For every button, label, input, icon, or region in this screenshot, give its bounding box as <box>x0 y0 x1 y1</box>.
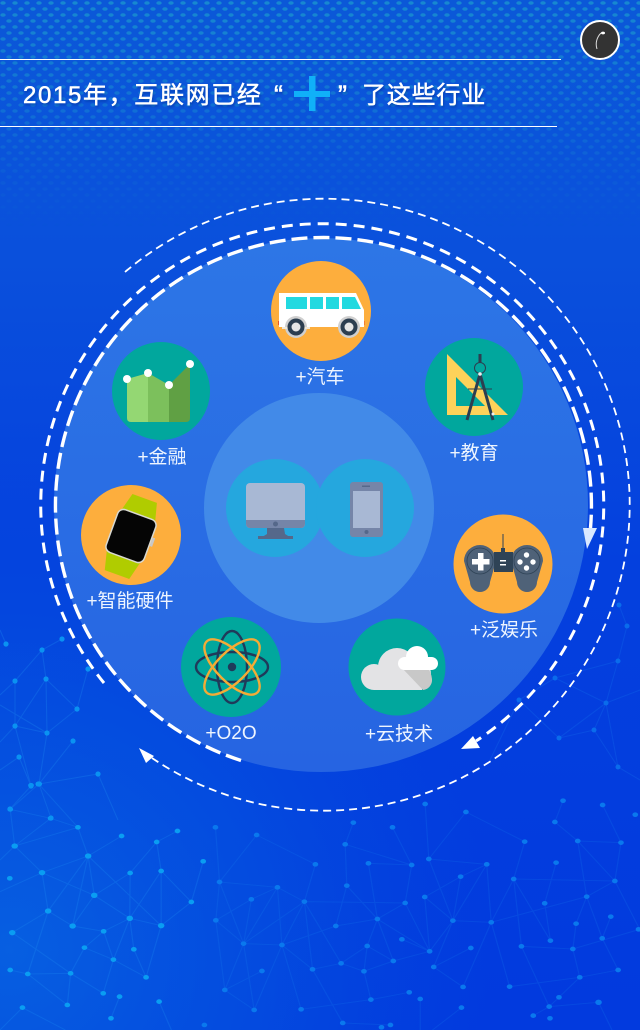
icon: bus <box>278 293 364 338</box>
icon: desktop computer <box>246 483 305 539</box>
label: 泛娱乐: +泛娱乐 <box>470 619 538 641</box>
item: 泛娱乐 <box>454 514 552 641</box>
icon: smart watch <box>97 491 167 583</box>
arrow ring middle <box>41 224 604 749</box>
icon: atom <box>196 631 268 703</box>
center circle <box>204 393 434 623</box>
item: 云技术 <box>348 618 446 745</box>
icon: game controller <box>464 534 543 592</box>
label: 汽车: +汽车 <box>295 366 345 388</box>
title: 2015年，互联网已经 <box>23 82 263 109</box>
label: 智能硬件: +智能硬件 <box>86 590 174 612</box>
icon: area chart <box>123 360 194 422</box>
icon: smartphone <box>350 482 383 537</box>
item: 汽车 <box>271 261 371 388</box>
label: 金融: +金融 <box>137 446 187 468</box>
label: 云技术: +云技术 <box>365 723 433 745</box>
background network lower <box>0 781 640 1030</box>
title: “ <box>274 80 283 110</box>
item: 智能硬件 <box>81 485 181 585</box>
title rule top <box>0 59 561 60</box>
icon: cloud <box>361 646 438 690</box>
label: O2O: +O2O <box>205 723 257 744</box>
icon: set square and compass <box>447 354 508 420</box>
title: ” <box>338 80 347 110</box>
title rule bottom <box>0 126 557 127</box>
arrow ring inner <box>55 237 597 760</box>
title <box>23 76 486 111</box>
item: 金融 <box>112 342 210 468</box>
item: 教育 <box>425 338 523 464</box>
label: 教育: +教育 <box>449 442 499 464</box>
background network upper <box>0 602 640 821</box>
title: 了这些行业 <box>362 82 486 109</box>
logo badge <box>581 21 619 59</box>
item: O2O <box>181 617 281 744</box>
arrow ring outer <box>125 199 630 811</box>
large circle panel <box>54 238 588 772</box>
